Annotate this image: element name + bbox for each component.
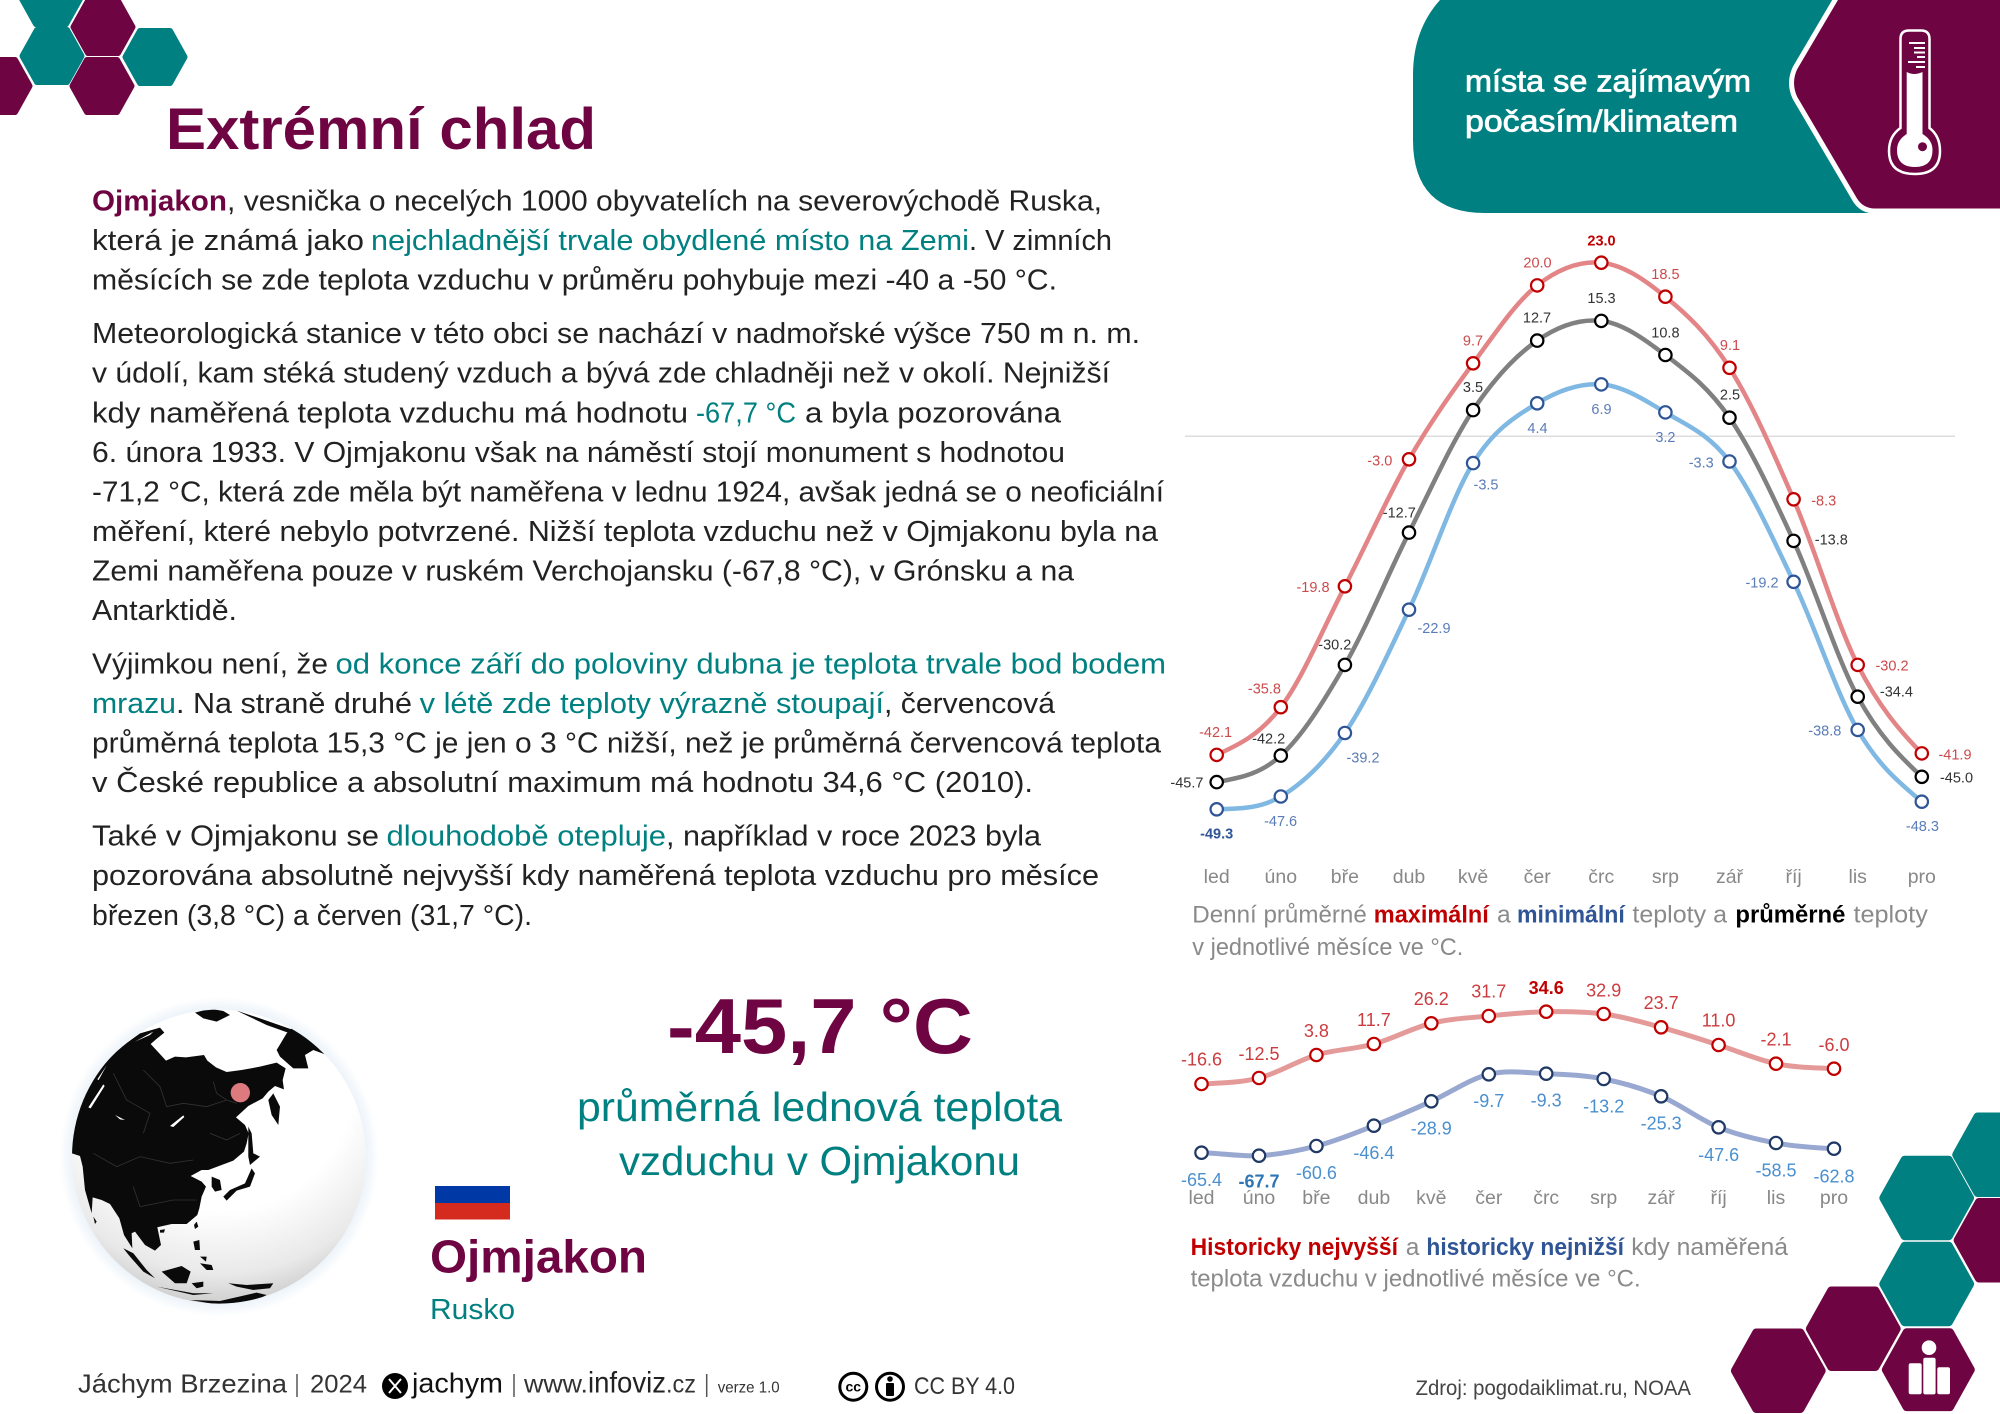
labels: maximum: -19.8 [1296, 580, 1330, 596]
chart: monthly daily temperatures [1170, 234, 1973, 888]
labels: record low: -9.3 [1531, 1090, 1562, 1110]
month axis: črc [1588, 866, 1615, 888]
labels: record low: -62.8 [1813, 1166, 1855, 1186]
markers: minimum [1210, 378, 1928, 816]
labels: mean [1170, 291, 1973, 791]
labels: maximum: 9.7 [1463, 334, 1483, 350]
text block: paragraph 3: v létě zde teploty výrazně stoupají [420, 688, 884, 720]
month axis: zář [1648, 1187, 1675, 1209]
line: record low [1202, 1072, 1834, 1156]
month axis: čer [1524, 866, 1551, 888]
month axis: říj [1710, 1187, 1727, 1209]
labels: mean: 10.8 [1651, 325, 1680, 341]
text block: paragraph 2: 6. února 1933. V Ojmjakonu však na náměstí stojí monument s hodnotou [92, 437, 1065, 469]
month axis: pro [1820, 1187, 1848, 1209]
month axis: dub [1393, 866, 1425, 888]
text block: paragraph 3: mrazu [92, 688, 176, 720]
text block: paragraph 1: nejchladnější trvale obydlené místo na Zemi [371, 225, 969, 257]
month axis: lis [1848, 866, 1867, 888]
text block: paragraph 1: která je známá jako [92, 225, 364, 257]
text block: paragraph 4: březen (3,8 °C) a červen (31,7 °C). [92, 900, 532, 932]
labels: record high: -6.0 [1818, 1035, 1850, 1055]
labels: record high: 32.9 [1586, 980, 1621, 1000]
line: record high [1202, 1012, 1834, 1084]
chart caption: daily temperatures: průměrné [1735, 902, 1845, 929]
labels: minimum: -38.8 [1808, 723, 1841, 739]
text block: paragraph 3: , červencová [884, 688, 1056, 720]
text block: paragraph 2: kdy naměřená teplota vzduchu má hodnotu [92, 397, 688, 429]
month axis: led [1204, 866, 1230, 888]
labels: record low: -13.2 [1583, 1096, 1624, 1116]
globe land [72, 1009, 327, 1305]
text block: paragraph 1: měsících se zde teplota vzduchu v průměru pohybuje mezi -40 a -50 °C. [92, 265, 1057, 297]
text block: paragraph 3: od konce září do poloviny dubna je teplota trvale bod bodem [336, 648, 1166, 680]
month axis: srp [1590, 1187, 1617, 1209]
footer credits: infoviz [588, 1367, 666, 1400]
labels: maximum: -30.2 [1875, 659, 1909, 675]
month axis: srp [1652, 866, 1679, 888]
labels: maximum: 9.1 [1720, 338, 1740, 354]
month axis: črc [1533, 1187, 1559, 1209]
chart caption: daily temperatures: a [1497, 902, 1511, 929]
labels: minimum: 3.2 [1655, 430, 1675, 446]
month axis: úno [1265, 866, 1297, 888]
labels: record low [1181, 1090, 1855, 1192]
labels: mean: -13.8 [1815, 532, 1848, 548]
text block: paragraph 2: -67,7 °C [696, 397, 796, 429]
text block: paragraph 1: . V zimních [969, 225, 1112, 257]
text block: paragraph 2: a byla pozorována [805, 397, 1062, 429]
labels: mean: -45.0 [1940, 770, 1973, 786]
text block: paragraph 3: Výjimkou není, že [92, 648, 328, 680]
chart caption: daily temperatures: v jednotlivé měsíce ve °C. [1192, 934, 1463, 961]
header banner [1413, 0, 2000, 213]
labels: mean: 3.5 [1463, 380, 1483, 396]
labels: maximum: -35.8 [1248, 682, 1281, 698]
labels: record high: 23.7 [1644, 993, 1679, 1013]
labels: record low: -58.5 [1755, 1160, 1797, 1180]
globe [59, 997, 379, 1317]
statistic: January temperature: -45,7 °C [667, 982, 973, 1070]
month axis: dub [1358, 1187, 1390, 1209]
month axis: bře [1331, 866, 1359, 888]
text block: paragraph 2: měření, které nebylo potvrzené. Nižší teplota vzduchu než v Ojmjakonu byla na [92, 516, 1159, 548]
text block: paragraph 1 [92, 186, 1112, 297]
banner purple hexagon [1792, 0, 2000, 211]
source: Zdroj: pogodaiklimat.ru, NOAA [1416, 1377, 1691, 1400]
labels: record low: -67.7 [1238, 1172, 1280, 1192]
footer credits: CC BY 4.0 [914, 1373, 1015, 1400]
icon: Creative Commons: cc [846, 1378, 861, 1394]
text block: paragraph 3 [92, 648, 1166, 799]
text block: paragraph 4 [92, 821, 1099, 932]
month axis: zář [1716, 866, 1744, 888]
labels: record high: -12.5 [1238, 1044, 1280, 1064]
globe sphere [72, 1010, 366, 1304]
text block: paragraph 4: , například v roce 2023 byla [666, 821, 1042, 853]
chart caption: daily temperatures: maximální [1374, 902, 1490, 929]
labels: record low: -25.3 [1641, 1114, 1682, 1134]
place name [430, 1231, 647, 1326]
place name: Ojmjakon [430, 1231, 647, 1283]
labels: mean: 15.3 [1587, 291, 1616, 307]
labels: mean: -45.7 [1170, 775, 1203, 791]
labels: record high: -2.1 [1760, 1030, 1792, 1050]
labels: maximum: -3.0 [1367, 453, 1392, 469]
labels: maximum: -41.9 [1938, 747, 1972, 763]
month axis: lis [1767, 1187, 1785, 1209]
text block: paragraph 2 [92, 318, 1164, 627]
markers: mean [1210, 315, 1928, 788]
text block: paragraph 2: v údolí, kam stéká studený vzduch a bývá zde chladněji než v okolí. Nejnižší [92, 358, 1110, 390]
statistic: January temperature [577, 982, 1062, 1184]
footer credits: verze 1.0 [718, 1380, 780, 1397]
chart caption: historical records [1191, 1234, 1788, 1293]
month axis [1204, 866, 1936, 888]
labels: minimum: -3.5 [1474, 478, 1498, 494]
text block: paragraph 3: průměrná teplota 15,3 °C je jen o 3 °C nižší, než je průměrná červencová teplota [92, 728, 1162, 760]
markers: record low [1195, 1068, 1840, 1162]
labels: record high: 3.8 [1304, 1021, 1329, 1041]
month axis: bře [1302, 1187, 1330, 1209]
icon: X logo [382, 1373, 408, 1399]
banner label: počasím/klimatem [1465, 104, 1738, 139]
decorative hexagons top left [0, 0, 184, 112]
banner teal background [1413, 0, 1880, 213]
line: average maximum [1217, 262, 1922, 755]
labels: minimum: -22.9 [1417, 621, 1451, 637]
month axis: kvě [1458, 866, 1488, 888]
chart caption: daily temperatures: teploty [1854, 902, 1929, 929]
labels: minimum: -19.2 [1745, 575, 1779, 591]
labels: record high: 34.6 [1529, 978, 1564, 998]
chart caption: daily temperatures: teploty a [1632, 902, 1727, 929]
text block: paragraph 3: . Na straně druhé [176, 688, 412, 720]
text block: paragraph 2: Zemi naměřena pouze v ruském Verchojansku (-67,8 °C), v Grónsku a na [92, 555, 1075, 587]
labels: minimum: -39.2 [1346, 751, 1380, 767]
labels: record low: -28.9 [1411, 1118, 1452, 1138]
month axis: led [1188, 1187, 1215, 1209]
labels: mean: -12.7 [1383, 506, 1416, 522]
globe halo [59, 997, 379, 1317]
labels: minimum [1200, 402, 1939, 843]
markers: maximum [1210, 256, 1928, 761]
chart caption: daily temperatures: Denní průměrné [1192, 902, 1367, 929]
footer credits: Jáchym Brzezina [78, 1369, 288, 1399]
labels: record high: 31.7 [1471, 982, 1506, 1002]
labels: mean: -34.4 [1880, 685, 1913, 701]
labels: minimum: -49.3 [1200, 827, 1233, 843]
chart caption: historical records: historicky nejnižší [1426, 1234, 1625, 1261]
labels: record low: -9.7 [1473, 1091, 1504, 1111]
decorative hexagons bottom right [1735, 1117, 2000, 1409]
text block: paragraph 2: Antarktidě. [92, 595, 237, 627]
globe lakes and rivers [93, 1070, 240, 1207]
text block: paragraph 1: Ojmjakon [92, 186, 227, 218]
chart caption: historical records: kdy naměřená [1631, 1234, 1788, 1261]
month axis: kvě [1416, 1187, 1446, 1209]
labels: mean: -30.2 [1318, 638, 1351, 654]
labels: minimum: -3.3 [1689, 456, 1714, 472]
chart caption: historical records: Historicky nejvyšší [1191, 1234, 1399, 1261]
footer credits: jachym [411, 1368, 503, 1399]
labels: record low: -60.6 [1296, 1163, 1337, 1183]
icon: Creative Commons [840, 1373, 904, 1400]
labels: minimum: -47.6 [1264, 814, 1297, 830]
text block: paragraph 4: Také v Ojmjakonu se [92, 821, 379, 853]
month axis: říj [1785, 866, 1802, 888]
banner label [1465, 64, 1751, 139]
labels: record low: -46.4 [1353, 1143, 1394, 1163]
text block: paragraph 4: dlouhodobě otepluje [386, 821, 666, 853]
month axis: čer [1475, 1187, 1503, 1209]
labels: minimum: -48.3 [1906, 819, 1939, 835]
chart caption: daily temperatures: minimální [1517, 902, 1626, 929]
labels: mean: 2.5 [1720, 388, 1740, 404]
chart caption: historical records: a [1406, 1234, 1420, 1261]
banner label: místa se zajímavým [1465, 64, 1751, 99]
markers: record high [1195, 1006, 1840, 1090]
line: average minimum [1217, 384, 1922, 809]
labels: record high: -16.6 [1181, 1050, 1222, 1070]
chart caption: daily temperatures [1192, 902, 1929, 961]
labels: mean: -42.2 [1252, 732, 1285, 748]
month axis [1188, 1187, 1848, 1209]
month axis: pro [1908, 866, 1936, 888]
labels: record high: 26.2 [1414, 989, 1449, 1009]
labels: record high: 11.7 [1357, 1010, 1391, 1030]
footer credits: .cz [666, 1371, 696, 1399]
statistic description: průměrná lednová teplota [577, 1084, 1062, 1130]
chart: historical records [1181, 978, 1855, 1209]
labels: minimum: 6.9 [1591, 402, 1612, 418]
labels: record high [1181, 978, 1850, 1070]
icon: Russian flag [435, 1186, 510, 1220]
labels: record high: 11.0 [1702, 1010, 1735, 1030]
month axis: úno [1243, 1187, 1275, 1209]
labels: record low: -47.6 [1698, 1145, 1739, 1165]
statistic description: vzduchu v Ojmjakonu [619, 1138, 1020, 1184]
labels: maximum: -42.1 [1199, 725, 1232, 741]
footer credits: www. [523, 1371, 588, 1399]
line: average mean [1217, 320, 1922, 782]
chart caption: historical records: teplota vzduchu v jednotlivé měsíce ve °C. [1191, 1266, 1641, 1293]
text block: paragraph 1: , vesnička o necelých 1000 obyvatelích na severovýchodě Ruska, [227, 186, 1102, 218]
labels: maximum: 18.5 [1651, 267, 1680, 283]
labels: record low: -65.4 [1181, 1170, 1222, 1190]
text block: paragraph 4: pozorována absolutně nejvyšší kdy naměřená teplota vzduchu pro měsíce [92, 860, 1099, 892]
footer credits [78, 1367, 1015, 1400]
globe white lakes [88, 1032, 184, 1127]
icon: thermometer [1889, 30, 1940, 174]
title: Extrémní chlad [166, 97, 596, 162]
labels: maximum [1199, 234, 1972, 763]
text block: paragraph 2: Meteorologická stanice v této obci se nachází v nadmořské výšce 750 m n. m. [92, 318, 1140, 350]
labels: mean: 12.7 [1523, 311, 1551, 327]
text block: paragraph 2: -71,2 °C, která zde měla být naměřena v lednu 1924, avšak jedná se o neoficiální [92, 476, 1164, 508]
labels: maximum: 20.0 [1523, 256, 1552, 272]
marker: Ojmjakon location [231, 1083, 250, 1102]
labels: maximum: -8.3 [1811, 493, 1836, 509]
place name: Rusko [430, 1294, 515, 1326]
statistic description [577, 1084, 1062, 1184]
text block: paragraph 3: v České republice a absolutní maximum má hodnotu 34,6 °C (2010). [92, 765, 1033, 799]
labels: minimum: 4.4 [1527, 421, 1548, 437]
icon: statistics hexagon [1886, 1333, 1970, 1407]
footer credits: 2024 [310, 1371, 367, 1399]
labels: maximum: 23.0 [1587, 234, 1616, 250]
